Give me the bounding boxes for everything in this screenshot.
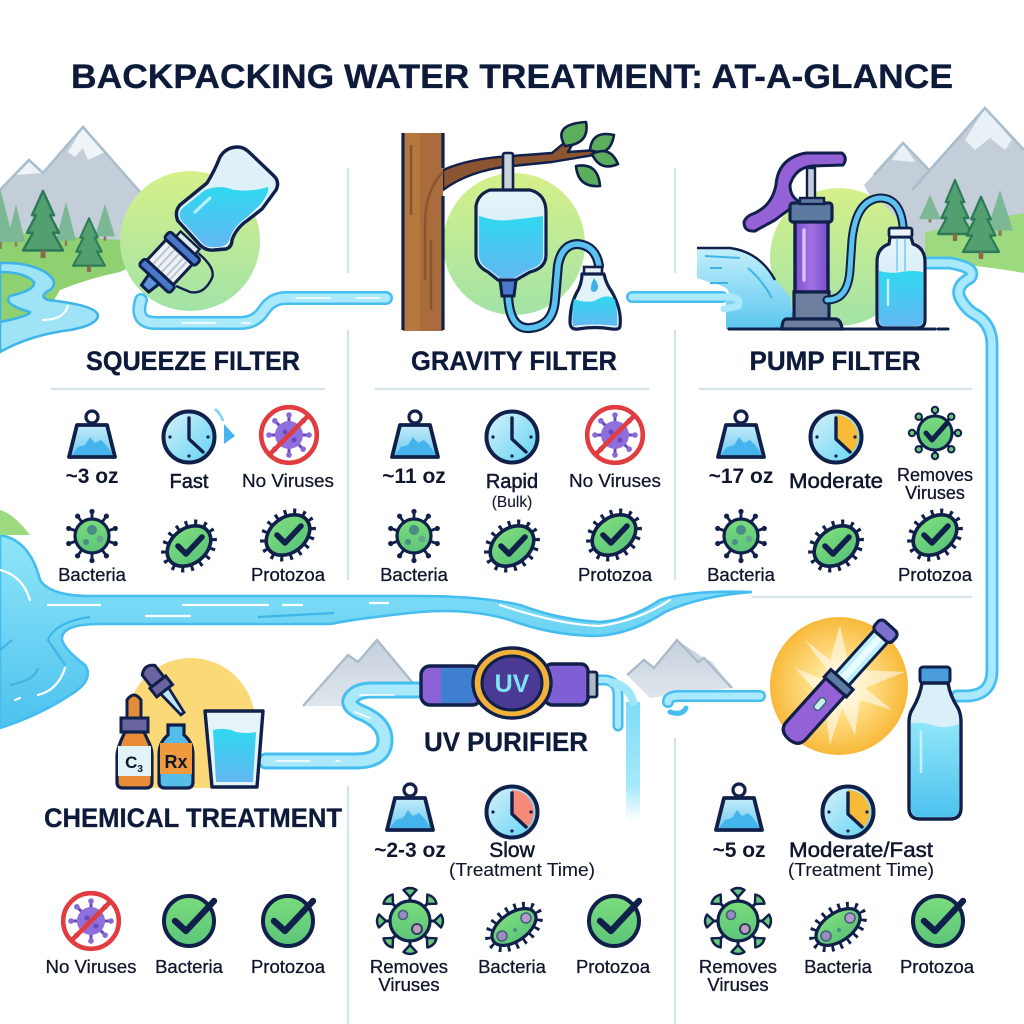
icon: protozoa check (589, 896, 639, 946)
pump ground line (729, 328, 948, 330)
title: BACKPACKING WATER TREATMENT: AT-A-GLANCE (71, 58, 953, 96)
bacteria label: Bacteria (155, 956, 224, 977)
illustration: chemical treatment (44, 640, 420, 977)
yellow backdrop circle (127, 658, 255, 788)
icon: bacteria check (164, 896, 214, 946)
virus label: No Viruses (46, 957, 136, 977)
right side water pipe (926, 263, 992, 696)
icon: protozoa checked (254, 502, 322, 568)
panel: gravity filter (380, 346, 661, 585)
hanger (503, 153, 513, 191)
C3 label: C (125, 753, 137, 772)
virus label (897, 465, 973, 503)
icon: clock (810, 412, 862, 462)
Rx label: Rx (164, 752, 188, 772)
collection bag (570, 267, 620, 329)
right mini mountain (627, 640, 732, 698)
green backdrop circle (120, 171, 260, 311)
blue Rx bottle (159, 725, 193, 788)
right mountains (864, 108, 1024, 250)
mountain behind flow (303, 640, 412, 706)
speed label: Slow (489, 839, 536, 862)
illustration: gravity filter (403, 122, 730, 331)
panel: squeeze filter (58, 346, 334, 585)
icon: green virus (377, 888, 443, 954)
bacteria label: Bacteria (804, 956, 873, 977)
UV device body (421, 648, 597, 718)
icon: weight (387, 784, 433, 830)
weight value: ~3 oz (65, 465, 119, 488)
icon: bacteria (65, 509, 119, 563)
icon: bacteria (714, 509, 768, 563)
virus label: Viruses (707, 974, 769, 995)
speed sublabel: (Treatment Time) (449, 860, 595, 880)
icon: removes viruses (909, 407, 961, 459)
virus label (699, 956, 777, 995)
water outflow drips (596, 680, 640, 824)
icon: bacteria (387, 509, 441, 563)
heading divider lines and section rules (51, 168, 972, 1024)
icon: clock (822, 786, 874, 838)
icon: clock (486, 786, 538, 838)
gravity tube (508, 244, 599, 328)
protozoa label: Protozoa (251, 956, 326, 977)
icon: protozoa check (913, 896, 963, 946)
icon: protozoa check (263, 896, 313, 946)
icon: weight (69, 411, 115, 457)
icon: weight (718, 411, 764, 457)
bacteria label: Bacteria (478, 956, 547, 977)
pump tube (827, 198, 903, 300)
water flow toward pump (632, 291, 730, 303)
left mountain and river scenery (0, 127, 140, 352)
iodine dropper bottle (117, 695, 152, 788)
bacteria label: Bacteria (707, 564, 776, 585)
heading: chemical treatment: CHEMICAL TREATMENT (44, 803, 342, 833)
speed label: Rapid (486, 471, 538, 493)
illustration: UV purifier (370, 640, 760, 995)
speed label: Moderate/Fast (789, 839, 933, 862)
right trees (919, 180, 1013, 259)
virus label: No Viruses (242, 471, 334, 491)
icon: no viruses (261, 407, 317, 463)
illustration: squeeze filter (120, 147, 386, 323)
panel: pump filter (707, 346, 973, 585)
squeeze filter cartridge (130, 226, 206, 303)
icon: no viruses (587, 407, 643, 463)
heading: gravity filter: GRAVITY FILTER (411, 346, 617, 376)
protozoa label: Protozoa (578, 564, 653, 585)
virus label: No Viruses (569, 471, 661, 491)
icon: clock (164, 409, 235, 462)
heading: UV purifier: UV PURIFIER (424, 727, 588, 757)
water flow to UV purifier (266, 690, 420, 761)
clean water bottle (877, 228, 925, 328)
UV lens ring (473, 648, 551, 718)
squeeze bottle (176, 147, 278, 250)
virus label: Removes (370, 956, 448, 977)
heading: squeeze filter: SQUEEZE FILTER (86, 346, 300, 376)
icon: green virus (705, 888, 771, 954)
protozoa label: Protozoa (251, 564, 326, 585)
icon: weight (716, 784, 762, 830)
virus label: Removes (699, 956, 777, 977)
illustration: UV pen purifier (699, 616, 975, 995)
tree trunk and branch (403, 133, 600, 331)
right green hill (925, 213, 1024, 273)
virus label: Viruses (378, 974, 440, 995)
green backdrop circle (443, 173, 585, 315)
C3 label: 3 (137, 764, 143, 775)
cap tether loop (176, 253, 213, 292)
pump body (782, 198, 842, 329)
weight value: ~17 oz (709, 465, 773, 488)
virus label: Viruses (905, 483, 965, 503)
speed label: Moderate (789, 470, 883, 493)
speed sublabel: (Treatment Time) (788, 860, 934, 880)
main river band (0, 510, 752, 728)
weight value: ~5 oz (712, 839, 766, 862)
bacteria label: Bacteria (58, 564, 127, 585)
UV lens text: UV (495, 670, 530, 698)
protozoa label: Protozoa (898, 564, 973, 585)
icon: protozoa checked (580, 502, 648, 568)
water flow to UV pen (668, 696, 760, 713)
bacteria label: Bacteria (380, 564, 449, 585)
glass of water (205, 711, 263, 787)
icon: bacteria bean (480, 896, 548, 958)
protozoa label: Protozoa (900, 956, 975, 977)
heading: pump filter: PUMP FILTER (750, 346, 920, 376)
green backdrop circle (770, 188, 908, 326)
tree leaves (561, 122, 618, 186)
icon: bacteria checked (802, 513, 870, 579)
speed sublabel: (Bulk) (492, 494, 532, 511)
sun backdrop (770, 617, 908, 755)
water bottle (909, 667, 961, 819)
virus label (370, 956, 448, 995)
pump handle and rod (744, 153, 845, 231)
UV pen wand (777, 616, 901, 749)
virus label: Removes (897, 465, 973, 485)
weight value: ~2-3 oz (374, 839, 446, 862)
hanging water bag (476, 190, 546, 296)
sun rays (790, 625, 905, 745)
speed label: Fast (170, 471, 209, 493)
icon: bacteria checked (155, 513, 223, 579)
water flow from squeeze filter (139, 298, 386, 323)
icon: protozoa checked (901, 502, 969, 568)
weight value: ~11 oz (382, 465, 446, 488)
source water splash (697, 248, 795, 329)
icon: bacteria bean (804, 896, 872, 958)
icon: no viruses (63, 893, 119, 949)
dropper (138, 661, 190, 720)
protozoa label: Protozoa (576, 956, 651, 977)
icon: weight (392, 411, 438, 457)
illustration: pump filter (697, 108, 1024, 696)
icon: clock (486, 412, 538, 462)
icon: bacteria checked (478, 513, 546, 579)
